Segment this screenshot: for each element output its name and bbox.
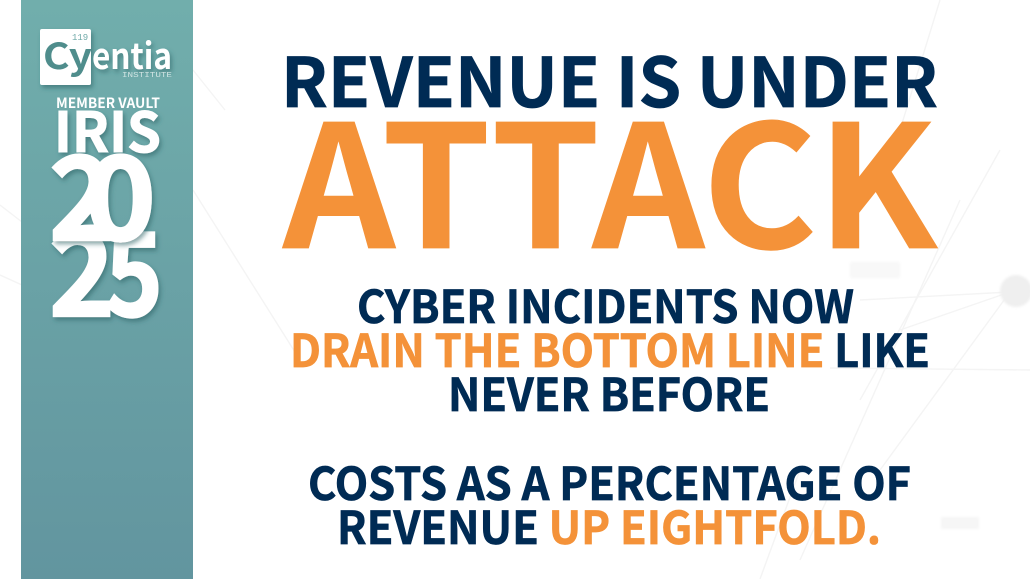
- text block: cyber incidents: NEVER BEFORE: [448, 359, 770, 424]
- year: 20: [49, 106, 156, 274]
- year: 25: 2: [49, 182, 115, 350]
- panel: teal sidebar: [21, 0, 193, 579]
- text block: cyber incidents: CYBER INCIDENTS NOW: [357, 271, 854, 336]
- heading: IRIS: IRIS: [54, 88, 161, 168]
- text block: costs: [308, 448, 911, 557]
- year: 25: [49, 182, 163, 350]
- title: attack: ATTACK: [282, 51, 938, 297]
- logo: Cyentia Institute: [40, 28, 173, 85]
- text block: costs: COSTS AS A PERCENTAGE OF: [308, 448, 911, 513]
- logo: Cyentia Institute: entia: [92, 28, 172, 80]
- text block: costs: REVENUE UP EIGHTFOLD.: [337, 492, 881, 557]
- year: 20: 0: [85, 106, 156, 274]
- logo: Cyentia Institute: Cy: [43, 28, 92, 80]
- text block: cyber incidents: DRAIN THE BOTTOM LINE LIKE: [290, 315, 930, 380]
- year: 20: 2: [49, 106, 115, 274]
- year: 25: 5: [105, 182, 163, 350]
- label: member vault: MEMBER VAULT: [56, 93, 160, 113]
- text block: cyber incidents: [290, 271, 930, 424]
- title line: revenue is under: REVENUE IS UNDER: [281, 28, 938, 127]
- logo: Cyentia Institute: 119: [72, 33, 88, 43]
- logo: Cyentia Institute: INSTITUTE: [122, 72, 173, 80]
